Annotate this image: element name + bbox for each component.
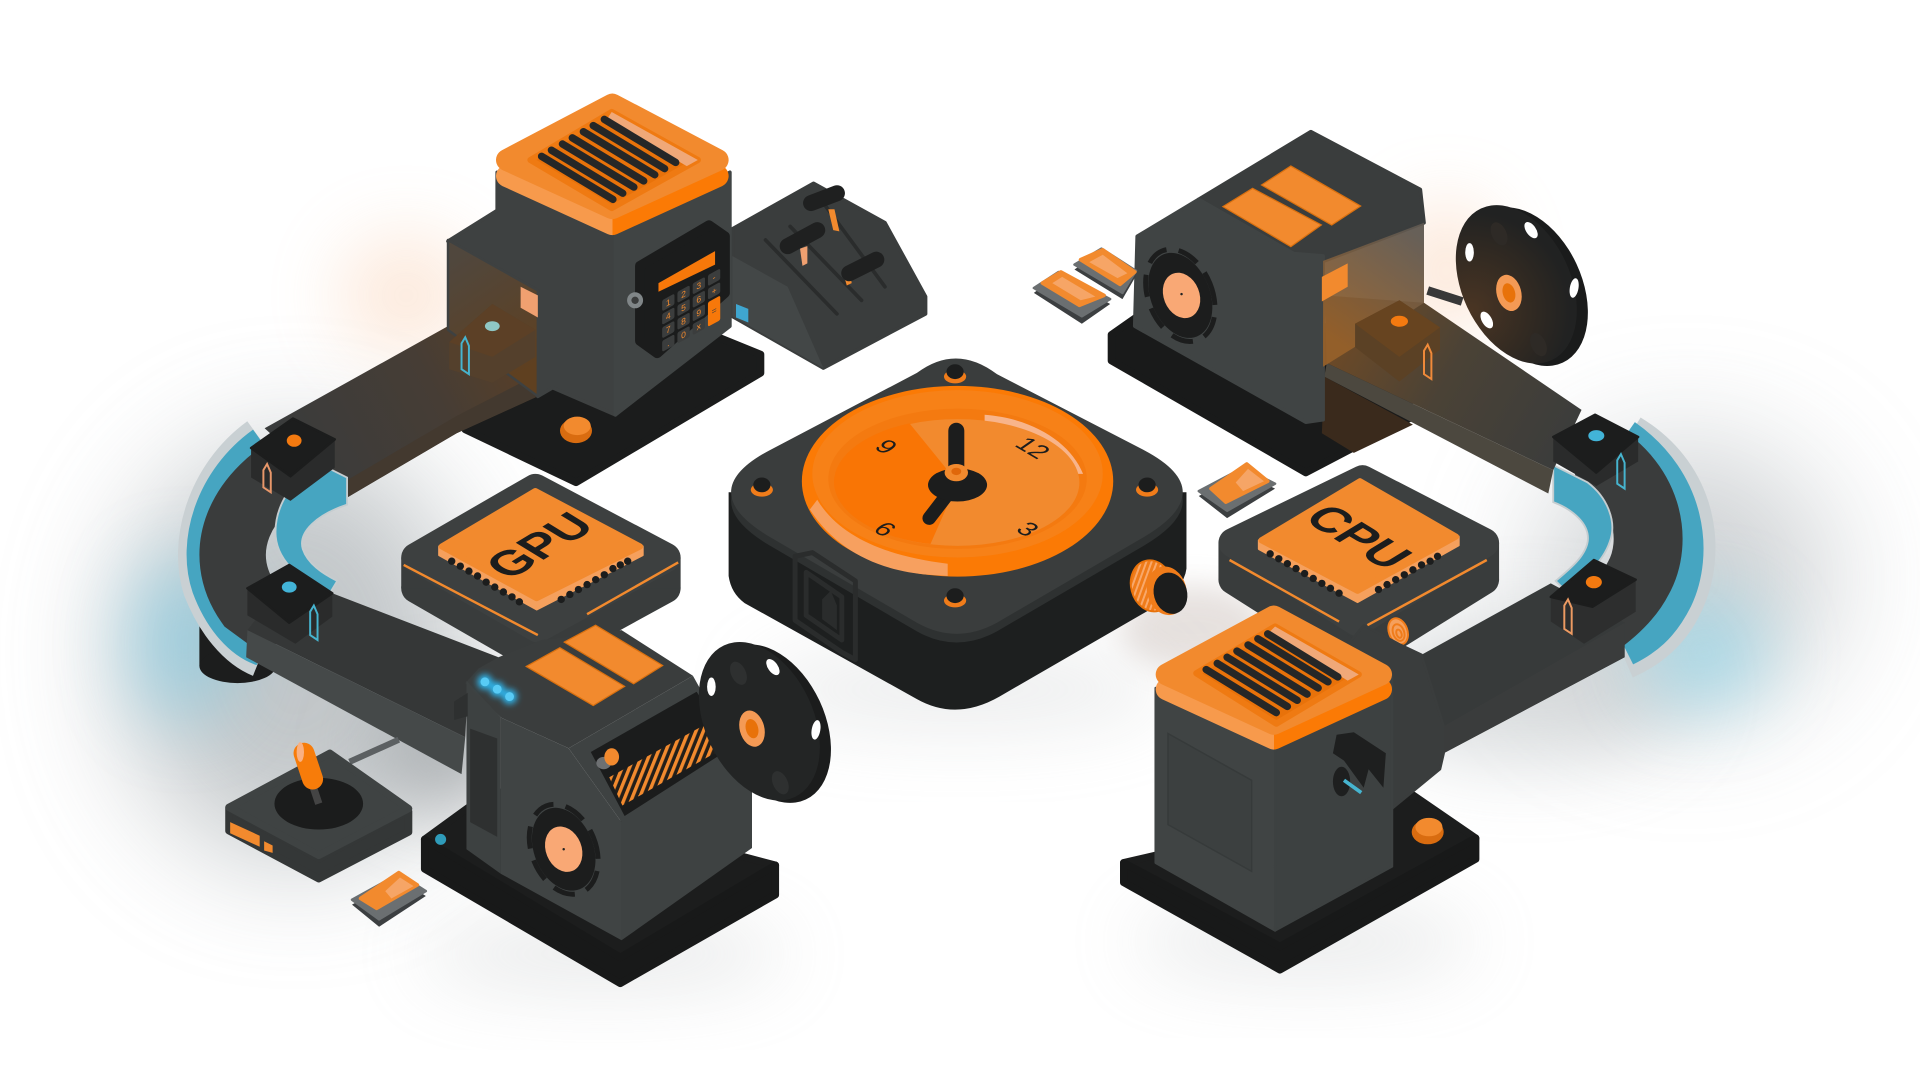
calculator keypad: 3	[696, 280, 701, 292]
lit panel in doorway	[521, 287, 538, 318]
plate body	[1218, 480, 1499, 658]
calculator keypad: 7	[666, 324, 671, 336]
tower body	[1135, 132, 1424, 422]
rocker switch four	[352, 873, 426, 927]
cargo box in doorway	[1355, 300, 1440, 382]
recessed side panel	[1168, 734, 1252, 871]
display panel with hatching	[591, 692, 732, 816]
calculator keypad: .	[667, 338, 670, 349]
calculator keypad: 0	[681, 329, 686, 341]
chip	[1259, 481, 1458, 602]
tower base plinth	[465, 295, 761, 482]
fan wheel	[1133, 239, 1228, 352]
conveyor arm upper-left	[265, 326, 538, 500]
clock hands	[928, 431, 987, 518]
joystick orange labels	[230, 822, 273, 853]
CPU label: CPU	[1293, 497, 1423, 577]
tower base plinth	[1124, 795, 1476, 970]
number 6: 6	[867, 518, 902, 541]
tower housing	[448, 172, 730, 415]
calculator keypad: 9	[696, 307, 701, 319]
outer blue arc	[200, 441, 261, 652]
calculator keypad: =	[712, 305, 717, 317]
panel: bottom-right vent tower	[1124, 560, 1636, 970]
calculator keypad: 6	[696, 294, 701, 305]
side column and latch	[454, 681, 501, 874]
joystick stick	[297, 742, 319, 804]
slider control panel	[732, 183, 926, 368]
GPU label: GPU	[474, 505, 606, 586]
calculator keypad: 5	[681, 302, 686, 314]
plate body	[401, 489, 681, 658]
clock body	[729, 492, 1186, 710]
panel: bottom-left main machine	[425, 622, 855, 983]
vent strips on top	[1223, 166, 1361, 247]
outer arc halo	[193, 433, 258, 662]
panel: top-left calculator tower	[265, 105, 926, 500]
cargo box in doorway	[449, 304, 535, 383]
panel: small rocker switches	[352, 249, 1275, 927]
orange base button	[560, 417, 592, 443]
orange base button	[1412, 818, 1444, 844]
machine front face	[569, 676, 752, 940]
side latch	[795, 553, 855, 660]
calculator keypad	[662, 268, 720, 352]
dial bezel	[802, 386, 1113, 577]
orange trim lines	[1230, 560, 1487, 625]
outer blue arc	[1627, 433, 1690, 652]
number 9: 9	[868, 436, 903, 458]
upper belt box	[251, 418, 335, 501]
machine top face	[465, 630, 693, 748]
inner blue arc	[1553, 465, 1612, 591]
tower housing	[1342, 625, 1444, 809]
orange top vent cap	[507, 105, 718, 224]
tower right face	[1275, 674, 1392, 930]
panel: CPU chip plate	[1218, 480, 1499, 658]
side knob	[1125, 555, 1192, 620]
lit panel in doorway	[1322, 263, 1348, 302]
vent strips on top	[526, 625, 663, 705]
number 3: 3	[1010, 518, 1045, 541]
rocker switch three	[1199, 464, 1275, 518]
fan wheel	[517, 794, 611, 905]
background glows and shadows	[123, 203, 1834, 991]
dial face	[836, 419, 1079, 546]
orange trim lines	[404, 562, 678, 635]
tower base plinth	[1111, 251, 1409, 473]
screws	[751, 364, 1158, 607]
machine side face	[501, 718, 622, 940]
rocker switch one	[1074, 249, 1136, 299]
calculator keypad: x	[697, 321, 701, 332]
clock top plate	[731, 358, 1183, 634]
calculator keypad: 1	[666, 297, 671, 309]
conveyor arm lower-right	[1422, 583, 1625, 753]
lower belt box	[247, 565, 332, 644]
outer arc halo	[1627, 430, 1701, 665]
calculator keypad: 2	[681, 288, 686, 300]
conveyor arm upper-right	[1324, 295, 1582, 494]
latch and blue key	[1333, 732, 1386, 796]
panel: joystick	[229, 740, 409, 879]
rocker switch two	[1034, 272, 1110, 324]
blue indicator lights	[478, 674, 517, 704]
number 12: 12	[1009, 433, 1056, 463]
calculator	[627, 225, 725, 353]
glass doorway	[1323, 223, 1424, 367]
film reel top right	[1428, 186, 1612, 386]
tower left face	[1156, 688, 1275, 930]
orange top vent cap	[1167, 617, 1381, 738]
clock rim	[731, 367, 1183, 642]
orange spiral	[1385, 616, 1411, 647]
support post	[199, 622, 276, 683]
panel: right curved conveyor	[1553, 430, 1701, 665]
calculator keypad: 4	[666, 310, 671, 322]
calculator keypad: 8	[681, 315, 686, 327]
joystick cable	[350, 740, 399, 762]
tinted base under conveyor	[1322, 377, 1413, 453]
panel: alarm clock	[729, 358, 1192, 710]
inner blue arc	[276, 463, 347, 593]
glass doorway	[448, 240, 538, 396]
calculator keypad: +	[712, 285, 717, 297]
machine base plinth	[425, 790, 775, 983]
panel: left curved conveyor	[193, 418, 498, 774]
belt box lower-right	[1551, 560, 1636, 644]
joystick base	[229, 753, 409, 879]
curved belt	[1575, 449, 1648, 638]
belt box upper-right	[1553, 415, 1638, 489]
blue base indicator	[435, 834, 446, 845]
calculator keypad: -	[713, 272, 716, 283]
chip pins	[448, 558, 631, 606]
chip pins	[1266, 550, 1441, 597]
joystick well	[274, 778, 363, 830]
dial wedge	[834, 423, 958, 544]
dial numbers	[867, 433, 1056, 541]
curved belt	[233, 458, 308, 630]
panel: GPU chip plate	[401, 489, 681, 658]
film reel bottom	[675, 622, 855, 822]
conveyor arm lower-left	[246, 585, 498, 774]
chip	[439, 491, 642, 609]
panel: top-right fan tower	[1111, 132, 1638, 494]
